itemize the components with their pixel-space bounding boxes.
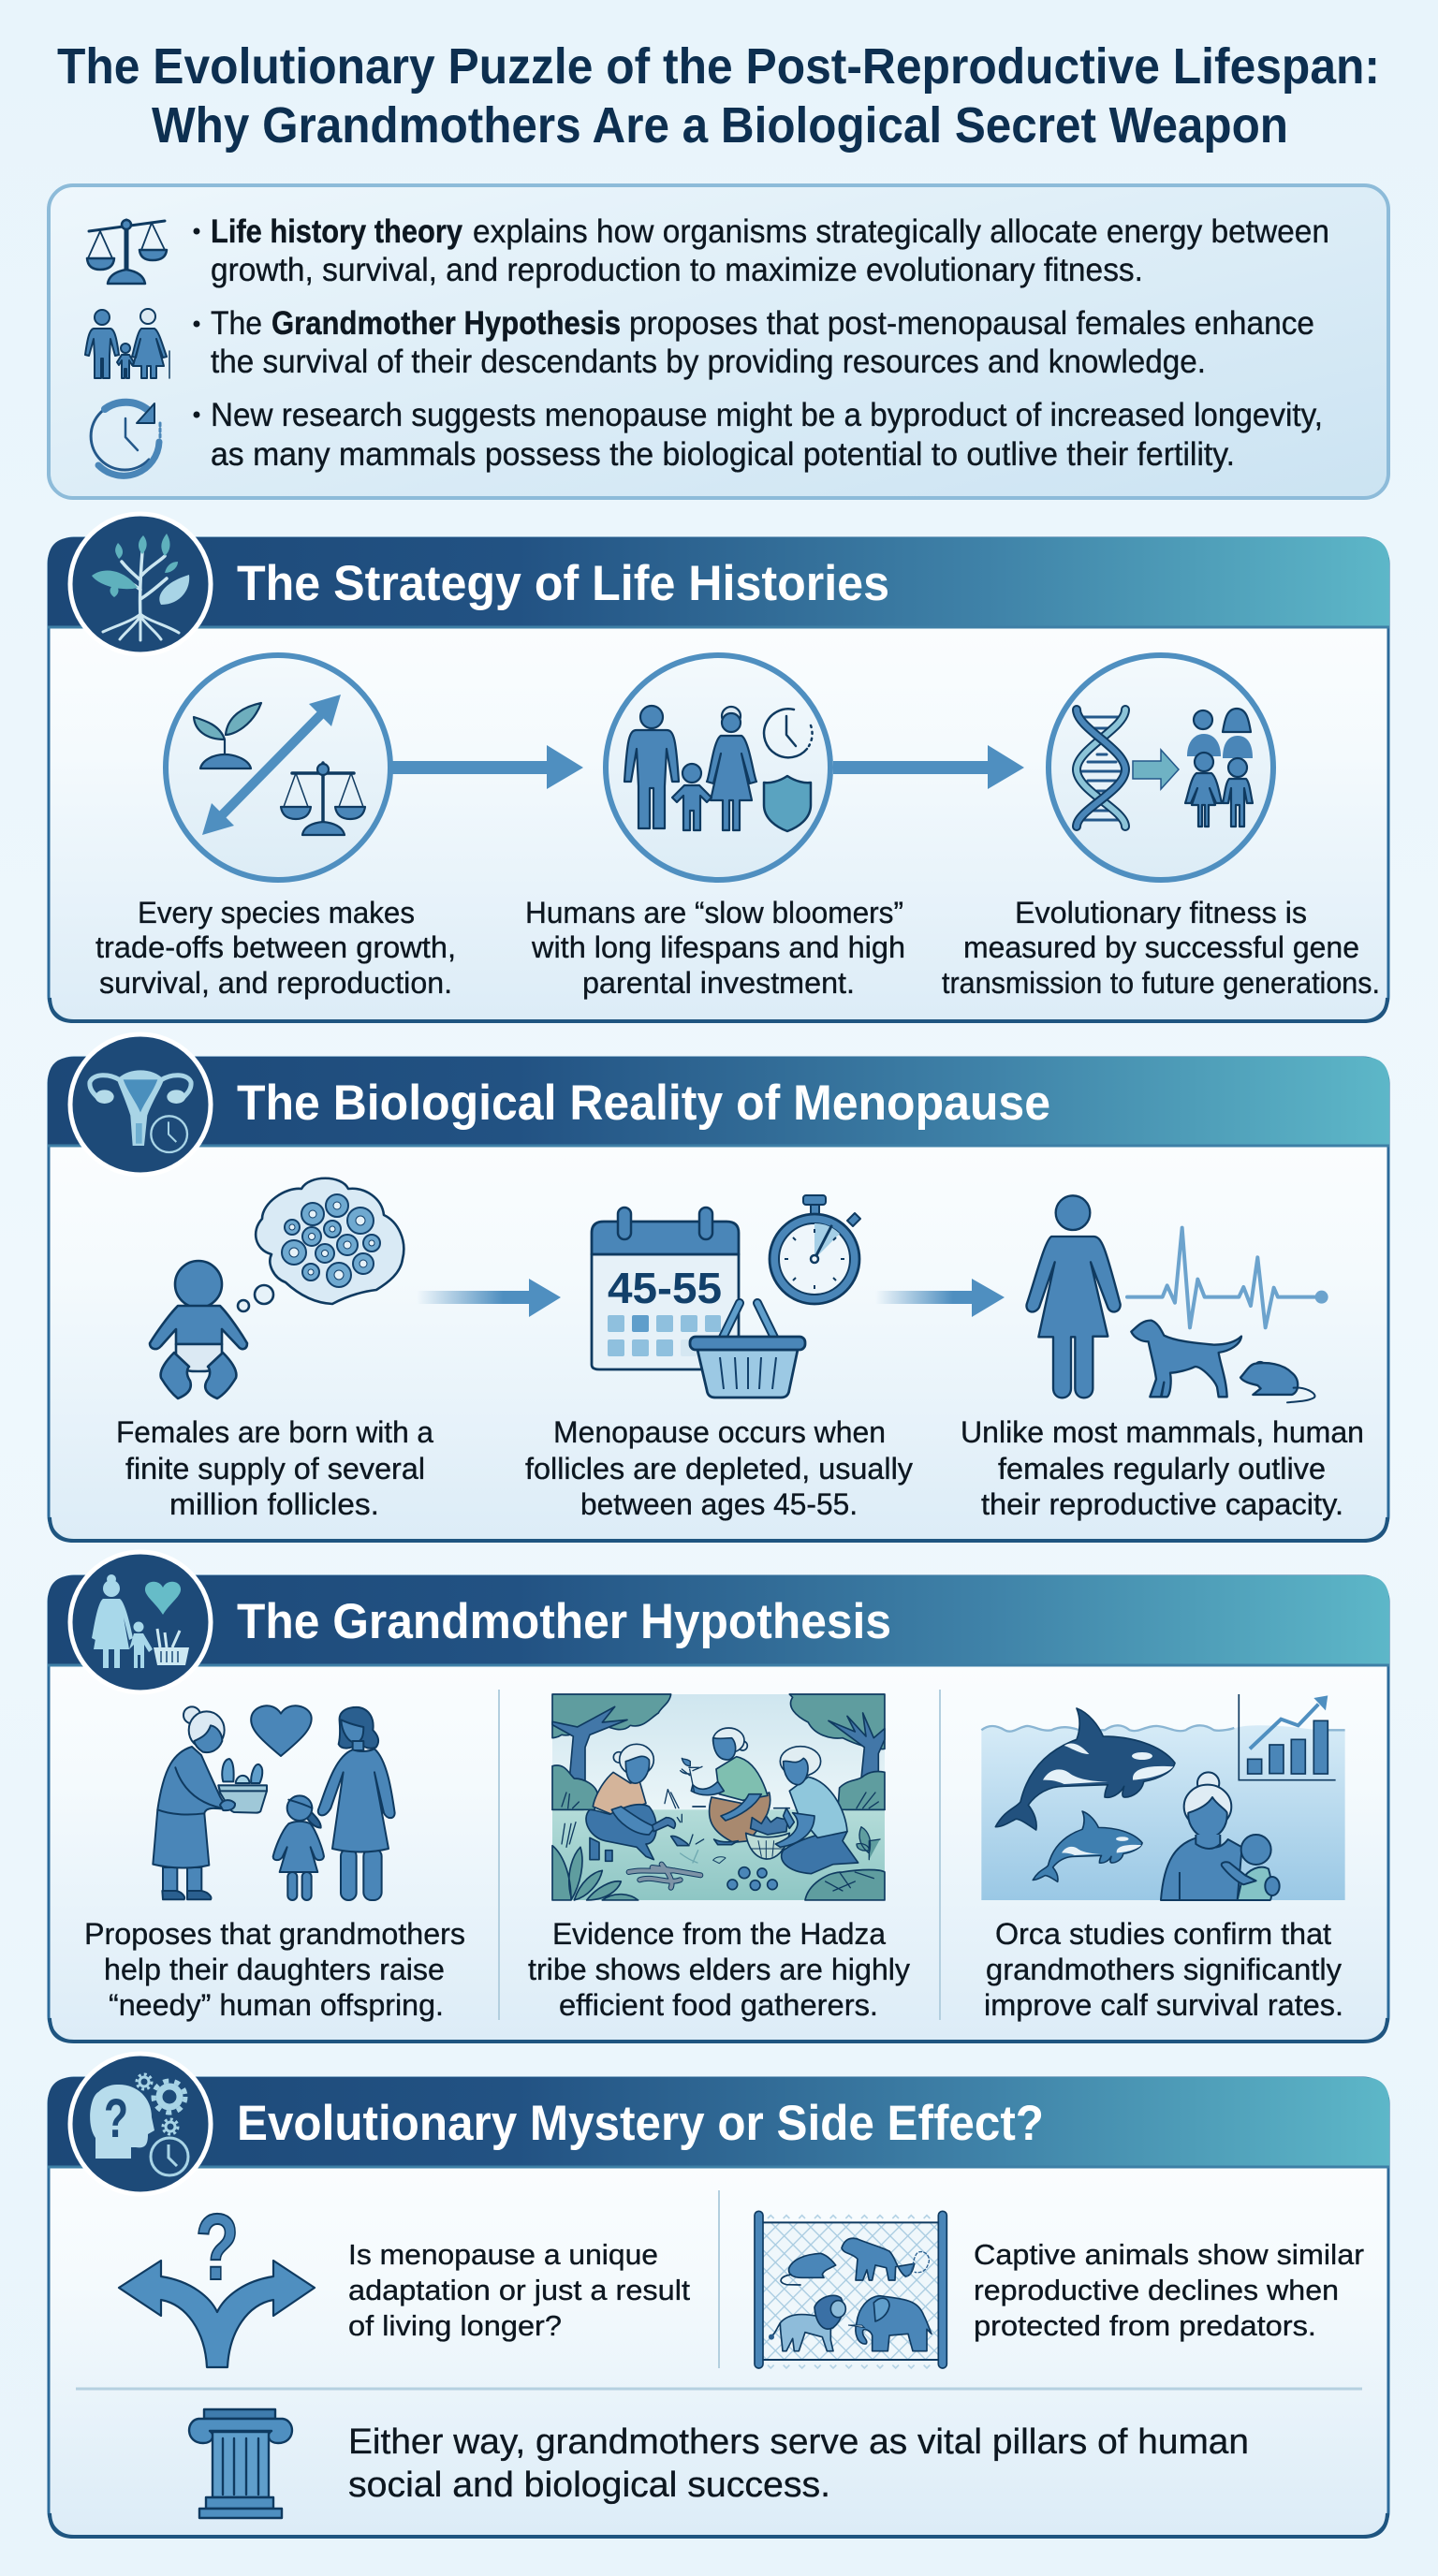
captions: million follicles. <box>169 1487 379 1521</box>
icon: question mark over fork in road: ? <box>195 2195 240 2300</box>
icon: balance scales <box>87 220 167 284</box>
icon: clock <box>764 709 813 757</box>
bullet text: grandmother hypothesis <box>193 305 1314 380</box>
panel: the strategy of life histories <box>48 514 1389 1021</box>
title <box>57 38 1380 154</box>
icon: shield <box>764 776 811 831</box>
bullet text: grandmother hypothesis: Grandmother Hypothesis <box>271 305 621 342</box>
conclusion text: social and biological success. <box>348 2466 830 2505</box>
captions: follicles are depleted, usually <box>525 1452 913 1486</box>
captive animals text: Captive animals show similar <box>974 2238 1364 2271</box>
icon: double arrow <box>202 695 341 835</box>
step: slow bloomers circle <box>606 655 830 880</box>
captive animals text: protected from predators. <box>974 2309 1316 2342</box>
captions: measured by successful gene <box>963 930 1359 964</box>
icon: clock with return arrow <box>91 402 160 476</box>
divider <box>499 1690 940 2020</box>
captive animals text <box>974 2238 1364 2342</box>
icon: sprout <box>194 703 261 768</box>
woman left <box>613 1752 624 1763</box>
section header bar <box>48 537 1389 628</box>
badge: head with question mark and gears: ? <box>104 2088 128 2149</box>
captions: Unlike most mammals, human <box>961 1415 1364 1449</box>
captions: grandmothers significantly <box>986 1953 1342 1986</box>
bullet text: life history theory: explains how organisms strategically allocate energy between <box>473 213 1329 250</box>
captive animals text: reproductive declines when <box>974 2274 1339 2306</box>
bullet text: grandmother hypothesis: proposes that post-menopausal females enhance <box>629 305 1314 342</box>
arrow <box>417 1279 561 1317</box>
panel: introduction <box>49 185 1388 498</box>
badge: grandmother, heart, basket <box>70 1552 211 1692</box>
captions: trade-offs between growth, <box>95 930 456 964</box>
captions: Humans are “slow bloomers” <box>525 896 903 929</box>
arrow <box>875 1279 1005 1317</box>
badge: tree <box>70 514 211 654</box>
icon: scales <box>281 763 365 835</box>
bullet text: grandmother hypothesis: The <box>211 305 262 342</box>
icon: parents and child <box>624 706 756 830</box>
section header bar <box>48 1057 1389 1147</box>
section header bar <box>48 1575 1389 1666</box>
bullet text: new research: New research suggests menopause might be a byproduct of increased longevity, <box>211 397 1323 433</box>
captions: between ages 45-55. <box>580 1487 858 1521</box>
icon: DNA helix <box>1077 710 1125 827</box>
captions <box>84 1917 1343 2022</box>
grandmother holding child <box>1161 1772 1280 1900</box>
thought bubbles <box>238 1178 404 1311</box>
heading: The Grandmother Hypothesis <box>237 1594 891 1649</box>
badge: uterus and clock <box>70 1034 211 1175</box>
follicles <box>282 1194 380 1287</box>
woman middle <box>738 1741 747 1750</box>
captions: with long lifespans and high <box>531 930 905 964</box>
step: gene transmission circle <box>1049 655 1273 880</box>
badge: head with question mark and gears <box>70 2054 211 2194</box>
captions: females regularly outlive <box>998 1452 1326 1486</box>
captions <box>95 896 1380 1000</box>
icon: baby with thought cloud of follicles <box>150 1178 404 1398</box>
question text: Is menopause a unique <box>348 2238 658 2271</box>
icon: calendar 45-55: 45-55 <box>608 1264 722 1312</box>
illustration: Hadza elders gathering food <box>552 1694 885 1900</box>
captions: tribe shows elders are highly <box>528 1953 910 1986</box>
icon: captive animals behind fence <box>755 2211 946 2368</box>
orca adult <box>995 1708 1175 1830</box>
captions: transmission to future generations. <box>942 966 1380 1000</box>
question text: adaptation or just a result <box>348 2274 690 2306</box>
bullet text: new research: as many mammals possess the biological potential to outlive their fertility. <box>211 436 1235 473</box>
divider <box>718 2190 720 2368</box>
captions: parental investment. <box>582 966 855 1000</box>
captions: Proposes that grandmothers <box>84 1917 465 1951</box>
captions: “needy” human offspring. <box>109 1988 444 2022</box>
panel: the biological reality of menopause <box>48 1034 1389 1541</box>
heading: The Strategy of Life Histories <box>237 556 889 611</box>
captions: Every species makes <box>138 896 415 929</box>
icon: basket <box>690 1303 805 1398</box>
title: Why Grandmothers Are a Biological Secret Weapon <box>152 97 1288 154</box>
baby <box>150 1261 247 1398</box>
captions: their reproductive capacity. <box>981 1487 1343 1521</box>
bullet text: life history theory <box>193 213 1329 288</box>
captions: Orca studies confirm that <box>995 1917 1331 1951</box>
arrow <box>392 745 583 789</box>
illustration: grandmother, mother and child with basket <box>153 1705 395 1900</box>
captions: Evolutionary fitness is <box>1015 896 1307 929</box>
captions <box>116 1415 1364 1521</box>
panel: the grandmother hypothesis <box>48 1552 1389 2042</box>
icon: calendar 45-55 <box>592 1208 739 1369</box>
bullet text: new research <box>193 397 1323 473</box>
captions: improve calf survival rates. <box>984 1988 1343 2022</box>
section header bar <box>48 2077 1389 2168</box>
icon: stopwatch <box>770 1195 860 1304</box>
question text: of living longer? <box>348 2309 562 2342</box>
arrow <box>833 745 1024 789</box>
icon: question mark over fork in road <box>119 2195 315 2367</box>
icon: generations of people <box>1185 709 1253 827</box>
captions: Females are born with a <box>116 1415 433 1449</box>
captions: efficient food gatherers. <box>559 1988 878 2022</box>
heading: Evolutionary Mystery or Side Effect? <box>237 2096 1044 2151</box>
captions: Evidence from the Hadza <box>552 1917 886 1951</box>
illustration: orcas and grandmother with chart <box>981 1694 1345 1900</box>
icon: small arrow <box>1133 750 1179 789</box>
question text <box>348 2238 690 2342</box>
heading: The Biological Reality of Menopause <box>237 1076 1050 1131</box>
captions: help their daughters raise <box>104 1953 445 1986</box>
bullet text: life history theory: Life history theory <box>211 213 462 250</box>
bullet text: grandmother hypothesis: the survival of their descendants by providing resources and knowledge. <box>211 344 1206 380</box>
orca calf <box>1033 1811 1142 1881</box>
step: trade-offs circle <box>166 655 390 880</box>
panel: evolutionary mystery or side effect <box>48 2054 1389 2537</box>
bar chart <box>1239 1694 1336 1780</box>
icon: pillar <box>189 2409 292 2518</box>
bullet text: life history theory: growth, survival, and reproduction to maximize evolutionary fitness. <box>211 252 1143 288</box>
conclusion text <box>348 2422 1249 2505</box>
food piles <box>629 1865 700 1888</box>
captions: survival, and reproduction. <box>99 966 452 1000</box>
captions: Menopause occurs when <box>553 1415 886 1449</box>
icon: woman, heartbeat, dog and mouse <box>1026 1195 1328 1402</box>
conclusion text: Either way, grandmothers serve as vital pillars of human <box>348 2422 1249 2462</box>
icon: family <box>85 309 169 378</box>
captions: finite supply of several <box>125 1452 425 1486</box>
woman right <box>809 1756 820 1767</box>
